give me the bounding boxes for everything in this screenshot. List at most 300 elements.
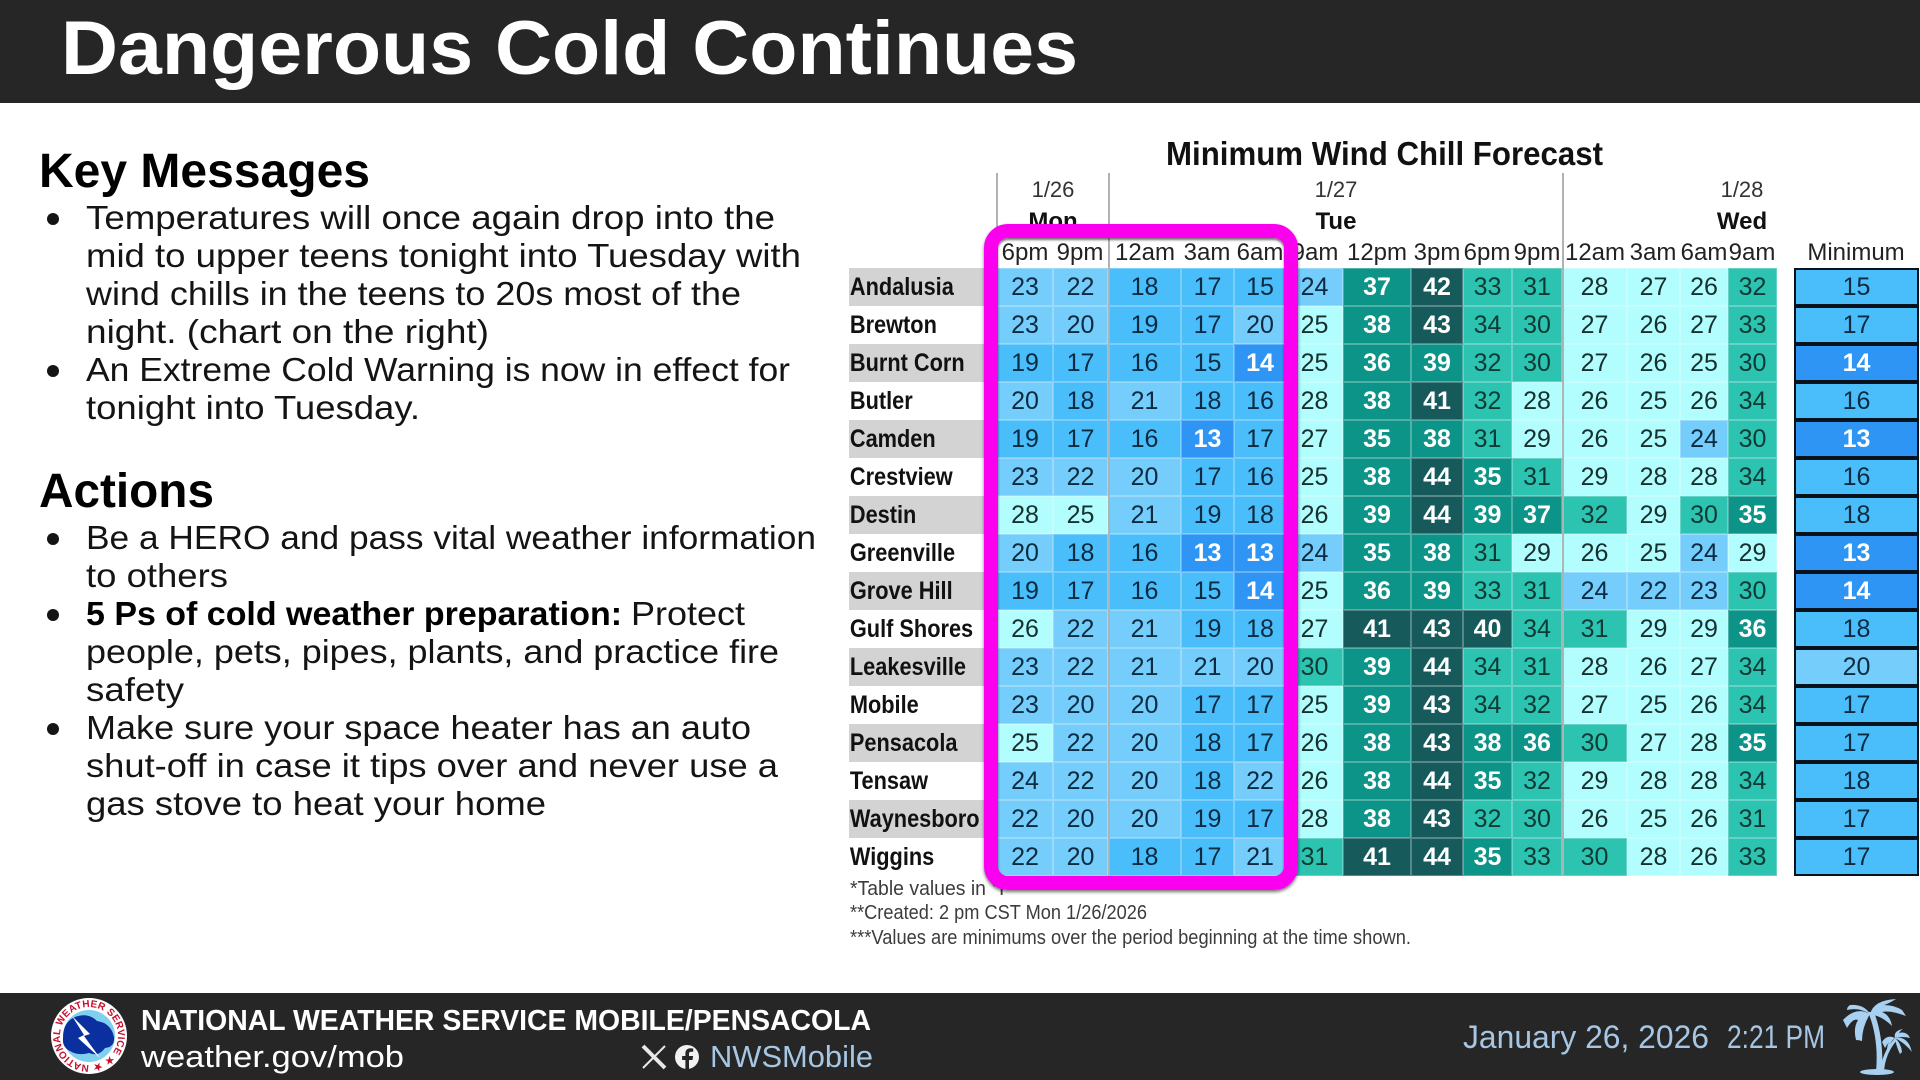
- row: Crestview: 16: [1843, 462, 1870, 490]
- row: Destin: 29: [1640, 501, 1667, 529]
- row: Leakesville: 22: [1067, 653, 1094, 681]
- row: Destin: 18: [1246, 501, 1274, 529]
- row: Brewton: 33: [1739, 311, 1766, 339]
- bullet: extreme cold warning: An Extreme Cold Warning is now in effect for: [86, 351, 790, 388]
- row: Grove Hill: 25: [1301, 577, 1328, 605]
- row: Grove Hill: 31: [1523, 577, 1551, 605]
- row: Pensacola: 25: [1011, 729, 1039, 757]
- row: Butler: 28: [1301, 387, 1328, 415]
- row: Andalusia: 17: [1194, 273, 1221, 301]
- row: Andalusia: 37: [1363, 273, 1391, 301]
- row: Andalusia: 27: [1640, 273, 1667, 301]
- row: Leakesville: 20: [1246, 653, 1274, 681]
- chart date headers: [1028, 177, 1767, 235]
- row: Tensaw: 22: [1067, 767, 1094, 795]
- row: Greenville: 38: [1423, 539, 1451, 567]
- row: Leakesville: 30: [1301, 653, 1328, 681]
- row: Andalusia: 23: [1011, 273, 1039, 301]
- row: Mobile: 20: [1131, 691, 1158, 719]
- row: Waynesboro: 25: [1640, 805, 1667, 833]
- row: Crestview: 44: [1423, 463, 1451, 491]
- chart date headers: Tue: [1316, 208, 1356, 235]
- chart time headers: 12pm: [1347, 239, 1407, 266]
- row: Camden: 38: [1423, 425, 1451, 453]
- row: Andalusia: 15: [1843, 272, 1870, 300]
- chart time headers: Minimum: [1807, 239, 1905, 266]
- row: Waynesboro: 32: [1474, 805, 1501, 833]
- row: Brewton: 34: [1474, 311, 1501, 339]
- bullet: space heater: shut-off in case it tips over and never use a: [86, 747, 779, 784]
- row: Tensaw: 44: [1423, 767, 1451, 795]
- row: Gulf Shores: 31: [1581, 615, 1608, 643]
- row: Andalusia: 32: [1739, 273, 1766, 301]
- row: Gulf Shores: 29: [1640, 615, 1667, 643]
- row: Wiggins: [850, 838, 1919, 876]
- row: Pensacola: 43: [1423, 729, 1451, 757]
- row: Camden: 26: [1581, 425, 1608, 453]
- bullet: be a hero: [47, 519, 816, 594]
- row: Butler: 41: [1423, 387, 1451, 415]
- row: Burnt Corn: 25: [1690, 349, 1718, 377]
- row: Grove Hill: 39: [1423, 577, 1451, 605]
- panel: actions: [39, 465, 816, 822]
- row: Gulf Shores: 21: [1131, 615, 1158, 643]
- row: Crestview: 22: [1067, 463, 1094, 491]
- row: Leakesville: 44: [1423, 653, 1451, 681]
- row: Wiggins: 35: [1474, 843, 1501, 871]
- row: Greenville: 35: [1363, 539, 1391, 567]
- row: Tensaw: 28: [1690, 767, 1718, 795]
- row: Leakesville: 28: [1581, 653, 1608, 681]
- footer bar: [0, 993, 1920, 1080]
- bullet: 5 Ps: 5 Ps of cold weather preparation:: [86, 595, 622, 632]
- row: Greenville: 29: [1523, 539, 1551, 567]
- row: Gulf Shores: 40: [1474, 615, 1501, 643]
- row: Camden: 29: [1523, 425, 1551, 453]
- row: Destin: 21: [1131, 501, 1158, 529]
- bullet: space heater: Make sure your space heater has an auto: [86, 709, 751, 746]
- row: Mobile: 25: [1640, 691, 1667, 719]
- row: Pensacola: 22: [1067, 729, 1094, 757]
- row: Leakesville: 31: [1523, 653, 1551, 681]
- row: Andalusia: 26: [1690, 273, 1718, 301]
- row: Brewton: 20: [1067, 311, 1094, 339]
- row: Grove Hill: 14: [1843, 576, 1870, 604]
- row: Gulf Shores: [850, 610, 1919, 648]
- footnotes: **Created: 2 pm CST Mon 1/26/2026: [850, 902, 1147, 924]
- row: Burnt Corn: 19: [1011, 349, 1039, 377]
- row: Butler: 20: [1011, 387, 1039, 415]
- row: Brewton: 26: [1640, 311, 1667, 339]
- row: Andalusia: Andalusia: [850, 273, 954, 301]
- row: Pensacola: 35: [1739, 729, 1766, 757]
- bullet: temperatures: wind chills in the teens to 20s most of the: [85, 275, 741, 312]
- row: Andalusia: 24: [1301, 273, 1328, 301]
- row: Waynesboro: 17: [1246, 805, 1274, 833]
- row: Crestview: 16: [1246, 463, 1274, 491]
- row: Destin: 30: [1690, 501, 1718, 529]
- date and time: January 26, 2026: [1463, 1019, 1709, 1055]
- row: Brewton: 27: [1690, 311, 1718, 339]
- chart time headers: 3pm: [1414, 239, 1460, 266]
- row: Andalusia: 33: [1474, 273, 1501, 301]
- row: Greenville: 20: [1011, 539, 1039, 567]
- bullet: 5 Ps: [47, 595, 779, 708]
- row: Butler: 25: [1640, 387, 1667, 415]
- row: Brewton: 38: [1363, 311, 1391, 339]
- row: Pensacola: 30: [1581, 729, 1608, 757]
- row: Destin: 37: [1523, 501, 1551, 529]
- row: Andalusia: 31: [1523, 273, 1551, 301]
- bullet: be a hero: to others: [86, 557, 228, 594]
- row: Mobile: 23: [1011, 691, 1039, 719]
- row: Burnt Corn: 32: [1474, 349, 1501, 377]
- row: Brewton: 30: [1523, 311, 1551, 339]
- row: Burnt Corn: 16: [1131, 349, 1158, 377]
- callout: magenta highlight box: [984, 224, 1298, 890]
- row: Destin: 19: [1194, 501, 1221, 529]
- row: Tensaw: 24: [1011, 767, 1039, 795]
- chart date headers: Wed: [1717, 208, 1767, 235]
- row: Destin: 35: [1739, 501, 1766, 529]
- row: Burnt Corn: 15: [1194, 349, 1221, 377]
- row: Camden: 13: [1843, 424, 1870, 452]
- row: Gulf Shores: Gulf Shores: [850, 615, 973, 643]
- bullet: 5 Ps: safety: [86, 671, 185, 708]
- row: Crestview: Crestview: [850, 463, 953, 491]
- bullet: temperatures: mid to upper teens tonight into Tuesday with: [86, 237, 801, 274]
- icon: X: [643, 1046, 665, 1068]
- row: Wiggins: 26: [1690, 843, 1718, 871]
- row: Mobile: 34: [1474, 691, 1501, 719]
- row: Destin: Destin: [850, 501, 916, 529]
- row: Wiggins: 30: [1581, 843, 1608, 871]
- row: Grove Hill: 14: [1246, 577, 1274, 605]
- title banner: Dangerous Cold Continues: [61, 6, 1078, 91]
- row: Greenville: 24: [1301, 539, 1328, 567]
- row: Mobile: 39: [1363, 691, 1391, 719]
- row: Grove Hill: 22: [1640, 577, 1667, 605]
- row: Destin: 39: [1474, 501, 1501, 529]
- row: Wiggins: 41: [1363, 843, 1391, 871]
- row: Gulf Shores: 36: [1739, 615, 1766, 643]
- row: Destin: 32: [1581, 501, 1608, 529]
- row: Mobile: 26: [1690, 691, 1718, 719]
- row: Brewton: 25: [1301, 311, 1328, 339]
- row: Butler: 34: [1739, 387, 1766, 415]
- heading: key messages: Key Messages: [39, 145, 370, 198]
- row: Greenville: 13: [1194, 539, 1221, 567]
- row: Brewton: Brewton: [850, 311, 937, 339]
- row: Andalusia: 18: [1131, 273, 1158, 301]
- row: Camden: 24: [1690, 425, 1718, 453]
- row: Camden: [849, 420, 1919, 458]
- row: Greenville: 24: [1690, 539, 1718, 567]
- row: Destin: [849, 496, 1919, 534]
- row: Crestview: 28: [1640, 463, 1667, 491]
- chart time headers: 6pm: [1002, 239, 1048, 266]
- row: Grove Hill: 19: [1011, 577, 1039, 605]
- row: Pensacola: 27: [1640, 729, 1667, 757]
- row: Crestview: 34: [1739, 463, 1766, 491]
- row: Butler: Butler: [850, 387, 913, 415]
- row: Mobile: 17: [1843, 690, 1870, 718]
- row: Brewton: [850, 306, 1919, 344]
- row: Tensaw: 20: [1131, 767, 1158, 795]
- row: Wiggins: 22: [1011, 843, 1039, 871]
- row: Brewton: 43: [1423, 311, 1451, 339]
- row: Leakesville: 27: [1690, 653, 1718, 681]
- row: Wiggins: 18: [1131, 843, 1158, 871]
- row: Leakesville: 21: [1194, 653, 1221, 681]
- agency name: NATIONAL WEATHER SERVICE MOBILE/PENSACOLA: [141, 1005, 871, 1037]
- row: Leakesville: 20: [1843, 652, 1870, 680]
- row: Tensaw: 18: [1843, 766, 1870, 794]
- row: Crestview: 35: [1474, 463, 1501, 491]
- row: Crestview: 20: [1131, 463, 1158, 491]
- row: Crestview: 25: [1301, 463, 1328, 491]
- row: Wiggins: 44: [1423, 843, 1451, 871]
- row: Burnt Corn: 14: [1843, 348, 1870, 376]
- row: Crestview: 31: [1523, 463, 1551, 491]
- row: Waynesboro: 28: [1301, 805, 1328, 833]
- row: Butler: 16: [1843, 386, 1870, 414]
- row: Brewton: 20: [1246, 311, 1274, 339]
- row: Burnt Corn: 30: [1523, 349, 1551, 377]
- row: Wiggins: Wiggins: [850, 843, 934, 871]
- row: Greenville: 29: [1739, 539, 1766, 567]
- row: Greenville: 18: [1067, 539, 1094, 567]
- chart title: Minimum Wind Chill Forecast: [1166, 135, 1603, 172]
- row: Waynesboro: Waynesboro: [850, 805, 980, 833]
- bullet: extreme cold warning: tonight into Tuesday.: [86, 389, 420, 426]
- row: Crestview: 23: [1011, 463, 1039, 491]
- row: Pensacola: 18: [1194, 729, 1221, 757]
- row: Wiggins: 17: [1843, 842, 1870, 870]
- website: weather.gov/mob: [140, 1039, 404, 1074]
- row: Waynesboro: 26: [1690, 805, 1718, 833]
- row: Grove Hill: 17: [1067, 577, 1094, 605]
- bullet: space heater: gas stove to heat your home: [86, 785, 546, 822]
- row: Gulf Shores: 26: [1011, 615, 1039, 643]
- row: Gulf Shores: 18: [1246, 615, 1274, 643]
- row: Burnt Corn: Burnt Corn: [850, 349, 965, 377]
- row: Gulf Shores: 41: [1363, 615, 1391, 643]
- row: Crestview: 29: [1581, 463, 1608, 491]
- row: Grove Hill: 23: [1690, 577, 1718, 605]
- bullet: temperatures: [47, 199, 801, 350]
- row: Burnt Corn: 26: [1640, 349, 1667, 377]
- row: Pensacola: 20: [1131, 729, 1158, 757]
- row: Mobile: 17: [1246, 691, 1274, 719]
- bullet: 5 Ps: Protect: [631, 595, 745, 632]
- row: Pensacola: 36: [1523, 729, 1551, 757]
- row: Greenville: 13: [1843, 538, 1870, 566]
- row: Grove Hill: 16: [1131, 577, 1158, 605]
- chart time headers: [1002, 239, 1905, 266]
- row: Andalusia: 28: [1581, 273, 1608, 301]
- row: Pensacola: 17: [1843, 728, 1870, 756]
- row: Waynesboro: 20: [1131, 805, 1158, 833]
- chart time headers: 9am: [1729, 239, 1775, 266]
- row: Waynesboro: 43: [1423, 805, 1451, 833]
- icon: facebook: [675, 1045, 699, 1069]
- row: Tensaw: 18: [1194, 767, 1221, 795]
- row: Tensaw: 29: [1581, 767, 1608, 795]
- row: Mobile: 32: [1523, 691, 1551, 719]
- bullet: be a hero: Be a HERO and pass vital weather information: [86, 519, 816, 556]
- row: Camden: 16: [1131, 425, 1158, 453]
- row: Mobile: 17: [1194, 691, 1221, 719]
- date and time: [1463, 1019, 1825, 1055]
- row: Waynesboro: 22: [1011, 805, 1039, 833]
- social handle: NWSMobile: [710, 1039, 873, 1074]
- row: Destin: 28: [1011, 501, 1039, 529]
- row: Mobile: 25: [1301, 691, 1328, 719]
- row: Greenville: 31: [1474, 539, 1501, 567]
- row: Butler: 21: [1131, 387, 1158, 415]
- chart time headers: 3am: [1630, 239, 1676, 266]
- row: Crestview: [850, 458, 1919, 496]
- title banner: [0, 0, 1920, 103]
- row: Grove Hill: 36: [1363, 577, 1391, 605]
- row: Wiggins: 28: [1640, 843, 1667, 871]
- row: Wiggins: 33: [1523, 843, 1551, 871]
- row: Waynesboro: 38: [1363, 805, 1391, 833]
- chart time headers: 3am: [1184, 239, 1230, 266]
- row: Crestview: 38: [1363, 463, 1391, 491]
- panel: key messages: [39, 145, 801, 426]
- row: Brewton: 17: [1843, 310, 1870, 338]
- row: Butler: 32: [1474, 387, 1501, 415]
- row: Greenville: [850, 534, 1919, 572]
- row: Leakesville: 39: [1363, 653, 1391, 681]
- row: Grove Hill: [849, 572, 1919, 610]
- row: Mobile: 27: [1581, 691, 1608, 719]
- row: Leakesville: 26: [1640, 653, 1667, 681]
- row: Tensaw: 22: [1246, 767, 1274, 795]
- row: Butler: 26: [1690, 387, 1718, 415]
- row: Pensacola: 17: [1246, 729, 1274, 757]
- chart time headers: 6pm: [1464, 239, 1510, 266]
- row: Mobile: 20: [1067, 691, 1094, 719]
- row: Burnt Corn: 25: [1301, 349, 1328, 377]
- row: Destin: 25: [1067, 501, 1094, 529]
- row: Leakesville: 34: [1739, 653, 1766, 681]
- row: Wiggins: 20: [1067, 843, 1094, 871]
- row: Burnt Corn: 39: [1423, 349, 1451, 377]
- row: Camden: 19: [1011, 425, 1039, 453]
- row: Destin: 44: [1423, 501, 1451, 529]
- row: Andalusia: [849, 268, 1919, 306]
- chart date headers: 1/27: [1315, 177, 1357, 202]
- bullet: space heater: [47, 709, 779, 822]
- row: Butler: 38: [1363, 387, 1391, 415]
- heading: actions: Actions: [39, 465, 214, 518]
- row: Tensaw: 35: [1474, 767, 1501, 795]
- chart date headers: 1/26: [1032, 177, 1074, 202]
- row: Wiggins: 21: [1246, 843, 1274, 871]
- row: Crestview: 17: [1194, 463, 1221, 491]
- chart date headers: 1/28: [1721, 177, 1763, 202]
- row: Waynesboro: [849, 800, 1919, 838]
- chart time headers: 9pm: [1057, 239, 1103, 266]
- row: Burnt Corn: [849, 344, 1919, 382]
- row: Burnt Corn: 36: [1363, 349, 1391, 377]
- chart time headers: 6am: [1681, 239, 1727, 266]
- row: Crestview: 28: [1690, 463, 1718, 491]
- bullet: temperatures: night. (chart on the right): [86, 313, 489, 350]
- row: Leakesville: 23: [1011, 653, 1039, 681]
- row: Greenville: 13: [1246, 539, 1274, 567]
- row: Brewton: 27: [1581, 311, 1608, 339]
- row: Butler: 26: [1581, 387, 1608, 415]
- row: Mobile: Mobile: [850, 691, 919, 719]
- row: Brewton: 19: [1131, 311, 1158, 339]
- icon: NWS seal: NATIONAL WEATHER SERVICE ★ ★: [53, 1000, 125, 1072]
- row: Destin: 18: [1843, 500, 1870, 528]
- bullet: extreme cold warning: [47, 351, 790, 426]
- row: Pensacola: [849, 724, 1919, 762]
- date and time: 2:21 PM: [1727, 1019, 1825, 1055]
- row: Leakesville: [849, 648, 1919, 686]
- row: Camden: 17: [1246, 425, 1274, 453]
- bullet: 5 Ps: people, pets, pipes, plants, and practice fire: [86, 633, 779, 670]
- row: Camden: 13: [1194, 425, 1221, 453]
- chart time headers: 9am: [1292, 239, 1338, 266]
- row: Brewton: 17: [1194, 311, 1221, 339]
- row: Butler: 18: [1194, 387, 1221, 415]
- row: Camden: 25: [1640, 425, 1667, 453]
- row: Mobile: 34: [1739, 691, 1766, 719]
- row: Camden: 17: [1067, 425, 1094, 453]
- footnotes: *Table values in °F: [850, 878, 1011, 900]
- row: Waynesboro: 30: [1523, 805, 1551, 833]
- row: Gulf Shores: 27: [1301, 615, 1328, 643]
- row: Andalusia: 22: [1067, 273, 1094, 301]
- chart time headers: 12am: [1115, 239, 1175, 266]
- row: Grove Hill: 15: [1194, 577, 1221, 605]
- row: Pensacola: Pensacola: [850, 729, 957, 757]
- row: Grove Hill: Grove Hill: [850, 577, 953, 605]
- row: Greenville: 26: [1581, 539, 1608, 567]
- row: Destin: 39: [1363, 501, 1391, 529]
- row: Grove Hill: 33: [1474, 577, 1501, 605]
- row: Mobile: 43: [1423, 691, 1451, 719]
- row: Tensaw: Tensaw: [850, 767, 928, 795]
- row: Tensaw: 28: [1640, 767, 1667, 795]
- row: Waynesboro: 19: [1194, 805, 1221, 833]
- row: Gulf Shores: 18: [1843, 614, 1870, 642]
- row: Waynesboro: 17: [1843, 804, 1870, 832]
- bullet: temperatures: Temperatures will once again drop into the: [86, 199, 775, 236]
- row: Wiggins: 17: [1194, 843, 1221, 871]
- row: Pensacola: 26: [1301, 729, 1328, 757]
- row: Wiggins: 33: [1739, 843, 1766, 871]
- row: Waynesboro: 26: [1581, 805, 1608, 833]
- forecast table: [849, 268, 1919, 876]
- row: Camden: 35: [1363, 425, 1391, 453]
- row: Wiggins: 31: [1301, 843, 1328, 871]
- row: Leakesville: 34: [1474, 653, 1501, 681]
- row: Pensacola: 38: [1474, 729, 1501, 757]
- row: Tensaw: 38: [1363, 767, 1391, 795]
- row: Gulf Shores: 19: [1194, 615, 1221, 643]
- row: Destin: 26: [1301, 501, 1328, 529]
- chart time headers: 9pm: [1514, 239, 1560, 266]
- footnotes: ***Values are minimums over the period beginning at the time shown.: [850, 927, 1411, 949]
- row: Camden: 30: [1739, 425, 1766, 453]
